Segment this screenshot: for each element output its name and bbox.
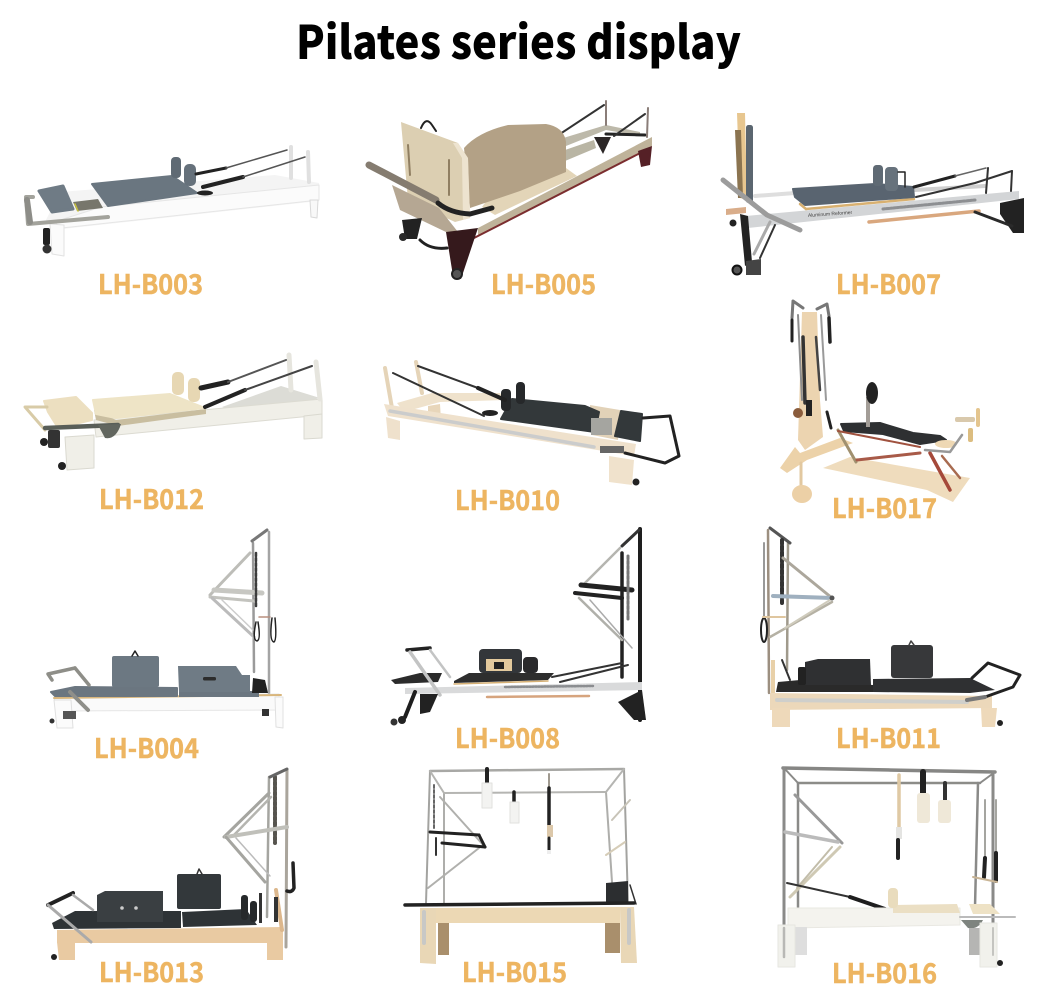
label: LH-B011: LH-B011 [836, 717, 941, 756]
machine: LH-B004 reformer with half tower, grey [48, 530, 283, 728]
label: LH-B005: LH-B005 [491, 263, 596, 302]
label: LH-B004: LH-B004 [94, 727, 199, 766]
panel: LH-B008 [390, 529, 646, 756]
panel: LH-B016 [778, 768, 1015, 991]
panel: LH-B011 [761, 528, 1020, 756]
panel: LH-B005 [369, 101, 652, 302]
machine: LH-B011 wood reformer with half tower [761, 528, 1020, 727]
label: LH-B015: LH-B015 [462, 951, 567, 990]
label: LH-B017: LH-B017 [832, 487, 937, 526]
machine: LH-B005 beige reformer with box [369, 101, 652, 279]
machine: LH-B012 cream reformer [25, 355, 322, 470]
label: LH-B003: LH-B003 [98, 263, 203, 302]
label: LH-B008: LH-B008 [455, 717, 560, 756]
machine: LH-B017 wood gyrotonic tower [780, 301, 980, 503]
machine: LH-B013 wood reformer with half tower [48, 769, 294, 960]
label: LH-B013: LH-B013 [99, 951, 204, 990]
label: LH-B012: LH-B012 [99, 478, 204, 517]
label: LH-B007: LH-B007 [836, 263, 941, 302]
machine: LH-B015 wood trapeze table [405, 769, 637, 964]
title: Pilates series display [296, 7, 741, 73]
machine: LH-B008 aluminum reformer with black tower [390, 529, 646, 726]
panel: LH-B007 [723, 113, 1024, 302]
panel: LH-B003 [26, 147, 319, 302]
machine: LH-B007 aluminum reformer: Aluminum Reformer [808, 210, 853, 219]
panel: LH-B013 [48, 769, 294, 990]
label: LH-B016: LH-B016 [832, 952, 937, 991]
panel: LH-B017 [780, 301, 980, 526]
panel: LH-B004 [48, 530, 283, 766]
label: LH-B010: LH-B010 [455, 479, 560, 518]
panel: LH-B012 [25, 355, 322, 517]
machine: LH-B003 white reformer [26, 147, 319, 256]
machine: LH-B016 white cadillac trapeze [778, 768, 1015, 967]
machine: LH-B010 wood reformer [384, 362, 679, 486]
panel: LH-B010 [384, 362, 679, 518]
panel: LH-B015 [405, 769, 637, 990]
machine: LH-B007 aluminum reformer [723, 113, 1024, 275]
